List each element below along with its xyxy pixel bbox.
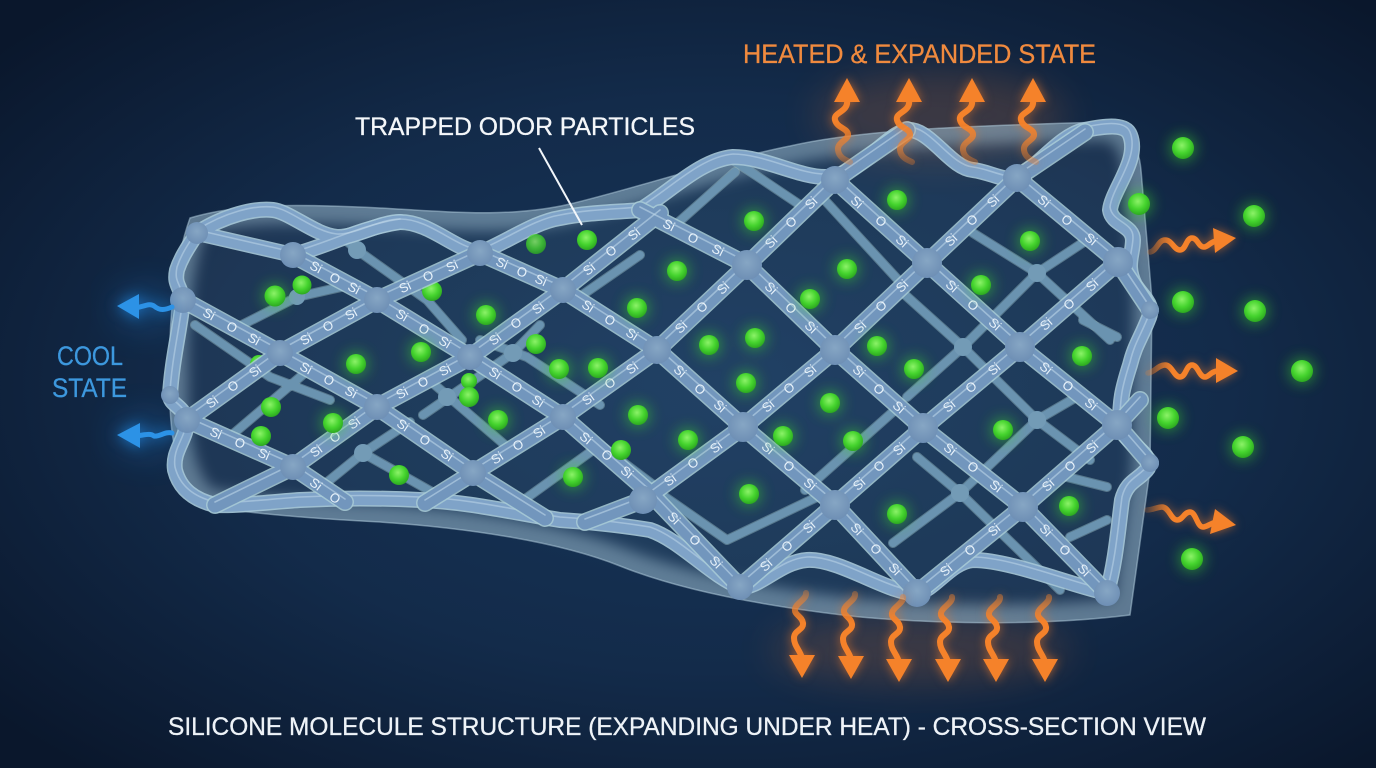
- Si and O atom labels on lattice: Si: [625, 224, 643, 243]
- Si and O atom labels on lattice: Si: [714, 278, 732, 297]
- Si and O atom labels on lattice: Si: [886, 560, 905, 578]
- Si and O atom labels on lattice: O: [420, 267, 436, 285]
- Si and O atom labels on lattice: Si: [711, 397, 729, 416]
- Si and O atom labels on lattice: O: [964, 296, 982, 314]
- Si and O atom labels on lattice: [200, 191, 1101, 579]
- Si and O atom labels on lattice: Si: [671, 362, 689, 381]
- Si and O atom labels on lattice: Si: [801, 475, 819, 494]
- Si and O atom labels on lattice: Si: [851, 317, 869, 336]
- Si and O atom labels on lattice: O: [872, 212, 890, 230]
- Si and O atom labels on lattice: O: [514, 263, 530, 281]
- caption: SILICONE MOLECULE STRUCTURE (EXPANDING UNDER HEAT) - CROSS-SECTION VIEW: [168, 713, 1206, 741]
- Si and O atom labels on lattice: O: [417, 431, 433, 449]
- Si and O atom labels on lattice: Si: [672, 317, 690, 336]
- Si and O atom labels on lattice: O: [780, 457, 798, 475]
- Si and O atom labels on lattice: Si: [208, 424, 224, 442]
- Si and O atom labels on lattice: Si: [762, 233, 780, 251]
- Si and O atom labels on lattice: O: [870, 457, 888, 475]
- Si and O atom labels on lattice: Si: [488, 449, 506, 467]
- back lattice: [195, 160, 1117, 590]
- Si and O atom labels on lattice: O: [510, 436, 526, 454]
- Si and O atom labels on lattice: Si: [801, 361, 819, 380]
- Si and O atom labels on lattice: O: [872, 297, 890, 315]
- Si and O atom labels on lattice: O: [1059, 377, 1077, 395]
- heat arrows: bottom: [789, 593, 1058, 682]
- Si and O atom labels on lattice: Si: [1075, 561, 1093, 579]
- Si and O atom labels on lattice: Si: [246, 361, 264, 380]
- Si and O atom labels on lattice: O: [601, 374, 619, 392]
- Si and O atom labels on lattice: Si: [486, 364, 504, 382]
- Si and O atom labels on lattice: O: [778, 537, 796, 555]
- Si and O atom labels on lattice: Si: [1037, 521, 1055, 539]
- label: cool state: [52, 341, 127, 403]
- Si and O atom labels on lattice: Si: [893, 276, 911, 295]
- Si and O atom labels on lattice: Si: [661, 470, 679, 489]
- Si and O atom labels on lattice: O: [691, 380, 709, 398]
- Si and O atom labels on lattice: O: [782, 213, 800, 231]
- Si and O atom labels on lattice: Si: [618, 463, 636, 482]
- Si and O atom labels on lattice: Si: [393, 384, 411, 402]
- cool arrow: upper left: [117, 294, 172, 319]
- Si and O atom labels on lattice: O: [782, 299, 800, 317]
- Si and O atom labels on lattice: O: [598, 446, 616, 464]
- Si and O atom labels on lattice: O: [320, 317, 336, 335]
- Si and O atom labels on lattice: O: [780, 379, 798, 397]
- Si and O atom labels on lattice: Si: [759, 439, 777, 458]
- Si and O atom labels on lattice: Si: [984, 191, 1002, 210]
- Si and O atom labels on lattice: Si: [1083, 275, 1101, 294]
- Si and O atom labels on lattice: Si: [890, 398, 908, 417]
- Si and O atom labels on lattice: Si: [623, 325, 641, 343]
- Si and O atom labels on lattice: O: [1060, 295, 1078, 313]
- Si and O atom labels on lattice: Si: [436, 361, 454, 379]
- Si and O atom labels on lattice: Si: [850, 474, 868, 493]
- Si and O atom labels on lattice: Si: [762, 279, 780, 297]
- Si and O atom labels on lattice: Si: [533, 271, 549, 289]
- Si and O atom labels on lattice: O: [867, 540, 885, 558]
- Si and O atom labels on lattice: O: [870, 380, 888, 398]
- Si and O atom labels on lattice: Si: [985, 359, 1003, 378]
- Si and O atom labels on lattice: O: [686, 531, 704, 549]
- Si and O atom labels on lattice: Si: [393, 306, 411, 324]
- Si and O atom labels on lattice: O: [964, 458, 982, 476]
- Si and O atom labels on lattice: Si: [436, 333, 454, 351]
- Si and O atom labels on lattice: Si: [577, 429, 595, 448]
- Si and O atom labels on lattice: O: [963, 211, 981, 229]
- Si and O atom labels on lattice: Si: [1083, 437, 1101, 456]
- green particle glow: [263, 135, 1315, 572]
- Si and O atom labels on lattice: Si: [529, 392, 547, 410]
- Si and O atom labels on lattice: Si: [297, 330, 315, 348]
- Si and O atom labels on lattice: Si: [800, 517, 818, 536]
- Si and O atom labels on lattice: Si: [623, 358, 641, 377]
- Si and O atom labels on lattice: Si: [707, 553, 725, 571]
- Si and O atom labels on lattice: O: [961, 541, 979, 559]
- Si and O atom labels on lattice: Si: [890, 439, 908, 458]
- Si and O atom labels on lattice: Si: [486, 329, 504, 348]
- Si and O atom labels on lattice: Si: [444, 257, 461, 275]
- heat arrows: top: [834, 78, 1046, 162]
- Si and O atom labels on lattice: Si: [759, 396, 777, 415]
- Si and O atom labels on lattice: O: [326, 489, 344, 507]
- Si and O atom labels on lattice: Si: [660, 216, 678, 234]
- Si and O atom labels on lattice: O: [693, 298, 711, 316]
- Si and O atom labels on lattice: Si: [940, 396, 958, 415]
- Si and O atom labels on lattice: O: [685, 229, 701, 247]
- Si and O atom labels on lattice: Si: [848, 193, 866, 212]
- Si and O atom labels on lattice: O: [326, 428, 344, 446]
- Si and O atom labels on lattice: Si: [494, 254, 510, 272]
- Si and O atom labels on lattice: Si: [1082, 395, 1100, 414]
- Si and O atom labels on lattice: Si: [529, 298, 547, 317]
- Si and O atom labels on lattice: Si: [985, 520, 1003, 539]
- Si and O atom labels on lattice: O: [684, 454, 702, 472]
- Si and O atom labels on lattice: Si: [665, 509, 683, 527]
- cool arrow: lower left: [117, 423, 172, 448]
- heat arrows: right: [1147, 228, 1238, 534]
- escaping green particles: [1128, 137, 1313, 570]
- Si and O atom labels on lattice: O: [1056, 541, 1074, 559]
- Si and O atom labels on lattice: Si: [394, 416, 412, 435]
- Si and O atom labels on lattice: Si: [1037, 314, 1055, 333]
- Si and O atom labels on lattice: O: [232, 434, 248, 452]
- trapped green odor particles: [251, 190, 1092, 524]
- Si and O atom labels on lattice: Si: [942, 230, 960, 249]
- back lattice nodes: [289, 241, 1046, 502]
- Si and O atom labels on lattice: Si: [1037, 359, 1055, 378]
- label: cool state: STATE: [52, 373, 127, 403]
- particles behind lattice: [250, 281, 477, 389]
- Si and O atom labels on lattice: O: [327, 269, 343, 287]
- heat glow: top: [815, 70, 1065, 160]
- Si and O atom labels on lattice: Si: [893, 232, 911, 251]
- Si and O atom labels on lattice: Si: [307, 258, 325, 276]
- Si and O atom labels on lattice: Si: [709, 241, 727, 259]
- Si and O atom labels on lattice: Si: [1082, 230, 1100, 249]
- Si and O atom labels on lattice: O: [1061, 457, 1079, 475]
- Si and O atom labels on lattice: Si: [757, 555, 775, 574]
- Si and O atom labels on lattice: O: [602, 242, 620, 260]
- Si and O atom labels on lattice: Si: [987, 477, 1005, 496]
- Si and O atom labels on lattice: Si: [579, 389, 597, 408]
- Si and O atom labels on lattice: Si: [256, 445, 272, 463]
- Si and O atom labels on lattice: O: [224, 377, 242, 395]
- Si and O atom labels on lattice: Si: [397, 278, 414, 296]
- Si and O atom labels on lattice: O: [602, 311, 618, 329]
- Si and O atom labels on lattice: Si: [580, 259, 598, 278]
- Si and O atom labels on lattice: Si: [707, 437, 725, 456]
- lattice junction nodes: [161, 164, 1159, 607]
- Si and O atom labels on lattice: Si: [307, 441, 325, 460]
- Si and O atom labels on lattice: Si: [345, 413, 363, 432]
- Si and O atom labels on lattice: Si: [297, 359, 315, 377]
- Si and O atom labels on lattice: O: [509, 378, 525, 396]
- Si and O atom labels on lattice: Si: [579, 297, 597, 315]
- Si and O atom labels on lattice: Si: [438, 446, 456, 465]
- Si and O atom labels on lattice: Si: [345, 279, 363, 297]
- Si and O atom labels on lattice: Si: [802, 318, 820, 336]
- cold glow: left: [115, 290, 175, 453]
- Si and O atom labels on lattice: O: [1058, 211, 1076, 229]
- Si and O atom labels on lattice: O: [962, 378, 980, 396]
- callout leader line: [539, 148, 582, 225]
- Si and O atom labels on lattice: Si: [941, 440, 959, 459]
- Si and O atom labels on lattice: Si: [307, 475, 325, 494]
- Si and O atom labels on lattice: Si: [943, 277, 961, 296]
- Si and O atom labels on lattice: O: [415, 373, 431, 391]
- heat glow: bottom: [770, 615, 1070, 685]
- Si and O atom labels on lattice: Si: [200, 305, 218, 323]
- Si and O atom labels on lattice: Si: [530, 423, 548, 441]
- Si and O atom labels on lattice: O: [507, 314, 525, 332]
- Si and O atom labels on lattice: Si: [986, 315, 1004, 334]
- Si and O atom labels on lattice: Si: [850, 362, 868, 381]
- Si and O atom labels on lattice: Si: [1039, 475, 1057, 494]
- label: cool state: COOL: [57, 341, 123, 371]
- callout: trapped odor particles: TRAPPED ODOR PARTICLES: [355, 113, 695, 141]
- Si and O atom labels on lattice: Si: [342, 305, 360, 323]
- Si and O atom labels on lattice: Si: [203, 392, 221, 411]
- Si and O atom labels on lattice: Si: [342, 383, 360, 401]
- Si and O atom labels on lattice: Si: [802, 194, 820, 212]
- Si and O atom labels on lattice: O: [224, 318, 240, 336]
- Si and O atom labels on lattice: O: [416, 320, 432, 338]
- Si and O atom labels on lattice: Si: [937, 560, 955, 579]
- silicone tube envelope: [170, 122, 1152, 623]
- heading: heated and expanded state: HEATED & EXPANDED STATE: [743, 39, 1096, 69]
- Si and O atom labels on lattice: O: [321, 371, 337, 389]
- Si and O atom labels on lattice: Si: [1035, 192, 1053, 211]
- Si and O atom labels on lattice: Si: [848, 520, 867, 538]
- Si and O atom labels on lattice: Si: [245, 330, 263, 348]
- main silicone lattice: [170, 124, 1150, 593]
